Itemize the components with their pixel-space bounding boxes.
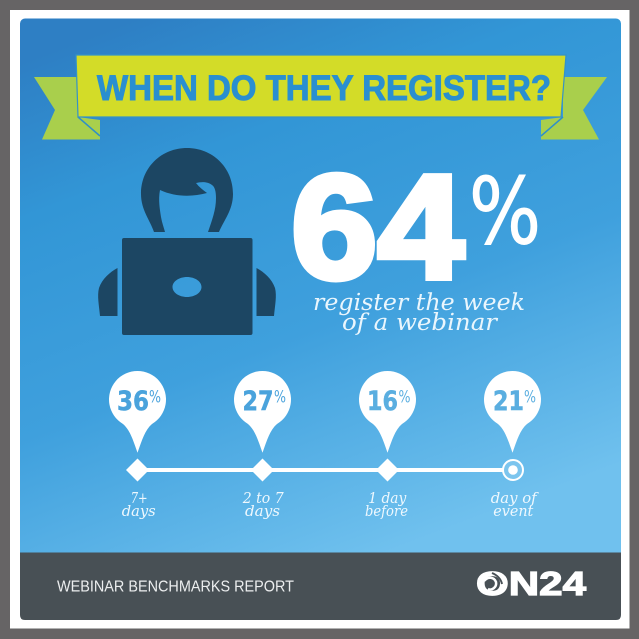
subtitle	[313, 290, 525, 336]
footer bar	[20, 552, 621, 620]
hair	[141, 148, 233, 232]
pin 27%: 27	[242, 386, 274, 417]
label: 7+ days	[122, 489, 156, 520]
left arm	[98, 268, 118, 316]
laptop	[122, 238, 252, 335]
pin 36%: %	[149, 388, 161, 408]
label: 1 day before: 1 day	[368, 489, 407, 507]
left ribbon tail	[34, 77, 100, 140]
pin 21%: 21	[493, 386, 524, 417]
banner	[34, 55, 607, 140]
title: WHEN DO THEY REGISTER?	[97, 69, 551, 108]
pin 16%: 16	[367, 386, 398, 417]
banner body	[76, 55, 566, 117]
pin 16%: %	[398, 388, 410, 408]
marker: 1 day before	[376, 458, 399, 482]
label: 2 to 7 days: 2 to 7	[242, 489, 284, 507]
64: 64	[291, 145, 464, 310]
pin 36%	[109, 371, 166, 453]
pin 16%	[359, 371, 416, 453]
label: 7+ days: 7+	[131, 489, 148, 507]
subtitle: register the week	[313, 290, 525, 316]
label: 7+ days: days	[122, 502, 156, 520]
label: 1 day before: before	[365, 502, 408, 520]
pin 27%	[234, 371, 291, 453]
right arm	[256, 268, 276, 316]
label: 2 to 7 days	[242, 489, 284, 520]
pin 21%: %	[524, 388, 536, 408]
label: 2 to 7 days: days	[245, 502, 280, 520]
label: day of event: day of	[491, 489, 539, 507]
label: day of event: event	[493, 502, 534, 520]
subtitle: of a webinar	[342, 310, 499, 336]
marker: 7+ days	[126, 458, 149, 482]
label: 1 day before	[365, 489, 408, 520]
footer text: WEBINAR BENCHMARKS REPORT	[57, 578, 294, 596]
right ribbon tail	[541, 77, 607, 140]
pin 27%: %	[274, 388, 286, 408]
pin 36%: 36	[117, 386, 149, 417]
logo: ON24: ON24	[476, 565, 587, 602]
icon: person at laptop	[98, 148, 276, 335]
label: day of event	[491, 489, 539, 520]
percent sign: %	[469, 158, 541, 265]
footer background	[20, 552, 621, 620]
marker: day of event	[503, 460, 523, 480]
headline stat	[291, 145, 541, 336]
marker: 2 to 7 days	[251, 458, 274, 482]
pin 21%	[484, 371, 541, 453]
timeline	[109, 371, 541, 520]
timeline line	[137, 468, 507, 472]
